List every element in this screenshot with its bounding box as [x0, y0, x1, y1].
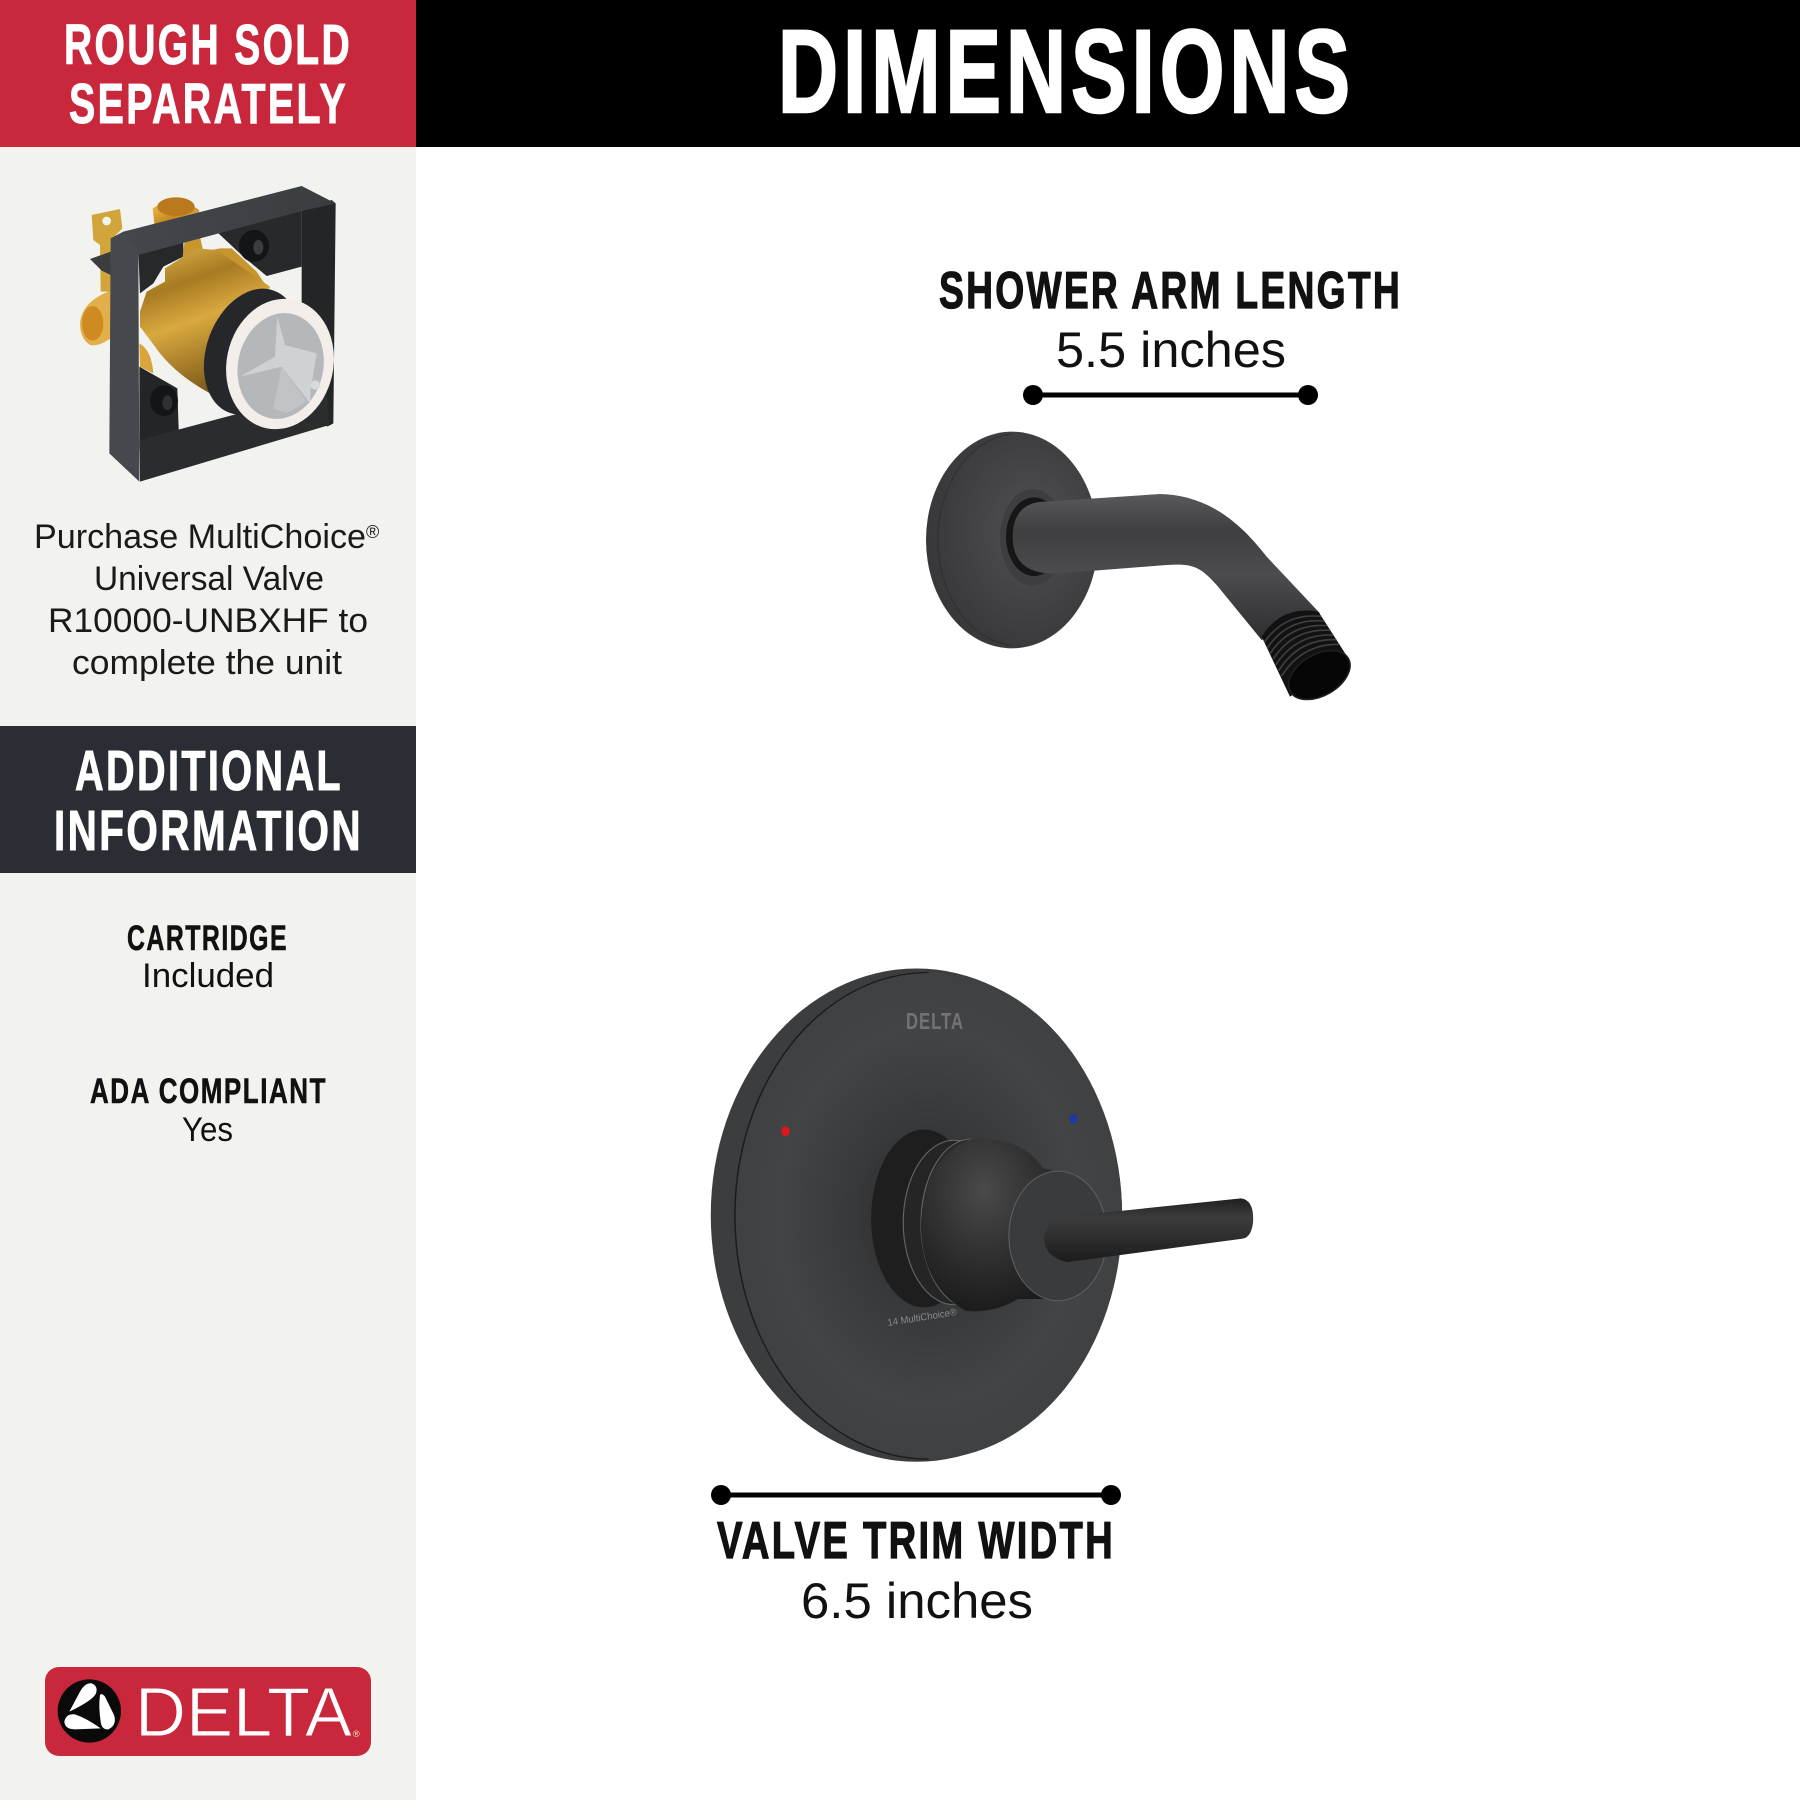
text: purchase note: ®: [366, 522, 379, 542]
cross on cap: [240, 317, 317, 403]
second ring: [921, 1139, 1021, 1308]
spec: ada compliant: [90, 1072, 327, 1149]
label: valve trim width: 6.5 inches: [801, 1573, 1033, 1629]
text: purchase note: R10000-UNBXHF to: [48, 602, 368, 640]
back panel, lower left: [139, 367, 179, 450]
image: rough valve: [80, 186, 346, 482]
dark collar: [187, 275, 316, 428]
label: valve trim width: VALVE TRIM WIDTH: [717, 1512, 1115, 1570]
trim plate face: [735, 972, 1122, 1459]
label: shower arm length: SHOWER ARM LENGTH: [939, 262, 1402, 320]
label: valve trim width: [717, 1512, 1115, 1629]
frame top face: [111, 186, 336, 255]
flange: [926, 432, 1098, 648]
stepped ring: [903, 1140, 1005, 1305]
title banner: dimensions: [416, 0, 1800, 147]
red banner: rough sold separately: SEPARATELY: [69, 72, 348, 136]
lever: [1044, 1198, 1253, 1262]
spec: ada compliant: ADA COMPLIANT: [90, 1072, 327, 1111]
image: shower arm: [926, 432, 1359, 710]
brass valve body: [140, 248, 270, 400]
label: shower arm length: 5.5 inches: [1056, 322, 1286, 378]
escutcheon ring: [1006, 497, 1062, 576]
frame left face: [109, 233, 139, 482]
cold indicator: [1069, 1114, 1078, 1124]
logo mark: [58, 1679, 121, 1743]
dark banner: additional information: ADDITIONAL: [75, 739, 343, 803]
label: shower arm length: [939, 262, 1402, 378]
spec: cartridge: [127, 919, 288, 995]
dimension line: valve trim: [711, 1485, 1121, 1505]
text: purchase note: Universal Valve: [94, 560, 324, 598]
brass neck behind frame: [180, 237, 267, 287]
back panel, upper right: [217, 210, 302, 276]
plate edge line: [735, 972, 929, 1459]
text: purchase note: Purchase MultiChoice: [34, 518, 366, 556]
engraved brand: DELTA: [906, 1008, 964, 1034]
spec: ada compliant: Yes: [182, 1111, 233, 1149]
title banner: dimensions: DIMENSIONS: [778, 6, 1355, 138]
arm tube: [1013, 494, 1320, 640]
image: valve trim: [711, 968, 1253, 1462]
base collar: [871, 1130, 977, 1307]
engraved model text: 14 MultiChoice®: [887, 1307, 958, 1329]
text: purchase note: complete the unit: [72, 644, 343, 682]
hub dome: [921, 1138, 1062, 1311]
escutcheon halo: [1000, 489, 1065, 586]
dimension line: shower arm: [1023, 385, 1318, 405]
delta logo: [45, 1667, 371, 1756]
dark banner: additional information: [0, 726, 416, 873]
frame bottom face: [139, 390, 329, 482]
gray plastic cap: [228, 305, 333, 427]
spec: cartridge: CARTRIDGE: [127, 919, 288, 958]
spec: cartridge: Included: [142, 957, 274, 995]
red banner: rough sold separately: [0, 0, 416, 147]
brass mounting tab and pipes behind frame: [80, 197, 199, 373]
trim plate edge: [711, 968, 1122, 1462]
hot indicator: [781, 1126, 790, 1136]
left sidebar panel: [0, 0, 416, 1800]
handle cap: [1009, 1171, 1107, 1301]
black fasteners: [150, 230, 269, 416]
delta logo: DELTA: [135, 1673, 352, 1751]
frame right wall: [302, 200, 336, 427]
chrome ring: [214, 289, 346, 439]
registered mark: ®: [353, 1729, 360, 1739]
dark banner: additional information: INFORMATION: [54, 799, 363, 863]
back panel, upper left: [138, 240, 183, 293]
red banner: rough sold separately: ROUGH SOLD: [64, 13, 352, 77]
text: purchase note: [34, 518, 379, 682]
flange edge: [938, 434, 1012, 645]
threaded end: [1262, 611, 1359, 710]
